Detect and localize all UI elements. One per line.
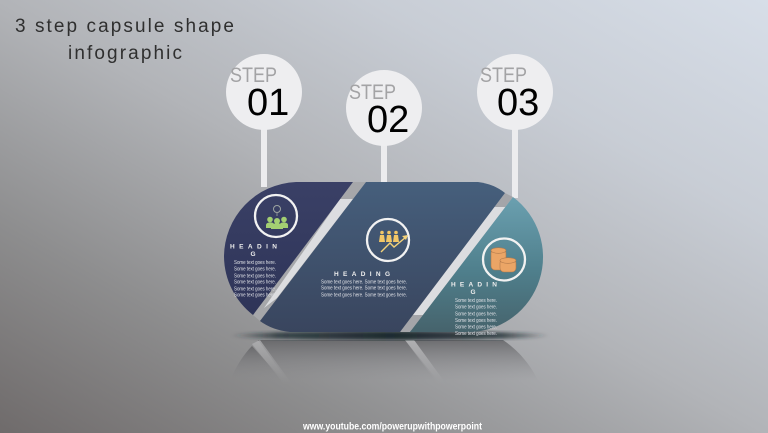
body text: Some text goes here. — [455, 318, 497, 324]
body text: Some text goes here. — [234, 292, 276, 298]
body text: Some text goes here. — [455, 312, 497, 318]
step 1 badge — [226, 54, 302, 130]
step 1 badge: STEP — [230, 64, 277, 87]
panel: step 3: G — [470, 289, 476, 296]
body text: Some text goes here. Some text goes here. — [321, 292, 407, 298]
title: 3 step capsule shape — [15, 16, 234, 37]
body text: Some text goes here. — [455, 325, 497, 331]
panel: step 1: G — [250, 251, 256, 258]
step 1 badge: 01 — [247, 82, 289, 124]
body text — [321, 280, 407, 298]
heading: HEADIN — [451, 282, 497, 289]
body text: Some text goes here. — [455, 305, 497, 311]
step 2 badge — [346, 70, 422, 146]
body text: Some text goes here. — [455, 298, 497, 304]
body text: Some text goes here. Some text goes here. — [321, 286, 407, 292]
diagonal band 1 — [253, 182, 366, 321]
panel: step 1 — [224, 182, 353, 315]
step 2 badge: STEP — [349, 81, 396, 104]
icon: team growth — [367, 219, 409, 261]
reflection — [230, 340, 538, 384]
body text: Some text goes here. — [234, 280, 276, 286]
diagonal band 2 — [400, 193, 513, 332]
connector stems — [261, 125, 518, 198]
icon: people with location pin — [255, 195, 297, 237]
body text: Some text goes here. Some text goes here. — [321, 280, 407, 286]
step 3 badge — [477, 54, 553, 130]
heading: HEADING — [334, 271, 390, 278]
heading: HEADIN — [230, 244, 277, 250]
icon: coins — [483, 238, 525, 280]
panel: step 2 — [260, 182, 505, 332]
capsule shadow — [230, 331, 550, 340]
step 3 badge: STEP — [480, 64, 527, 87]
body text — [234, 260, 276, 298]
body text: Some text goes here. — [234, 260, 276, 266]
title — [15, 16, 234, 64]
step 3 badge: 03 — [497, 82, 539, 124]
body text: Some text goes here. — [234, 286, 276, 292]
body text: Some text goes here. — [234, 266, 276, 272]
panel: step 3 — [410, 197, 543, 337]
footer url: www.youtube.com/powerupwithpowerpoint — [302, 422, 483, 432]
title: infographic — [68, 43, 182, 64]
step 2 badge: 02 — [367, 99, 409, 141]
body text — [455, 298, 497, 337]
body text: Some text goes here. — [234, 274, 276, 280]
body text: Some text goes here. — [455, 331, 497, 337]
